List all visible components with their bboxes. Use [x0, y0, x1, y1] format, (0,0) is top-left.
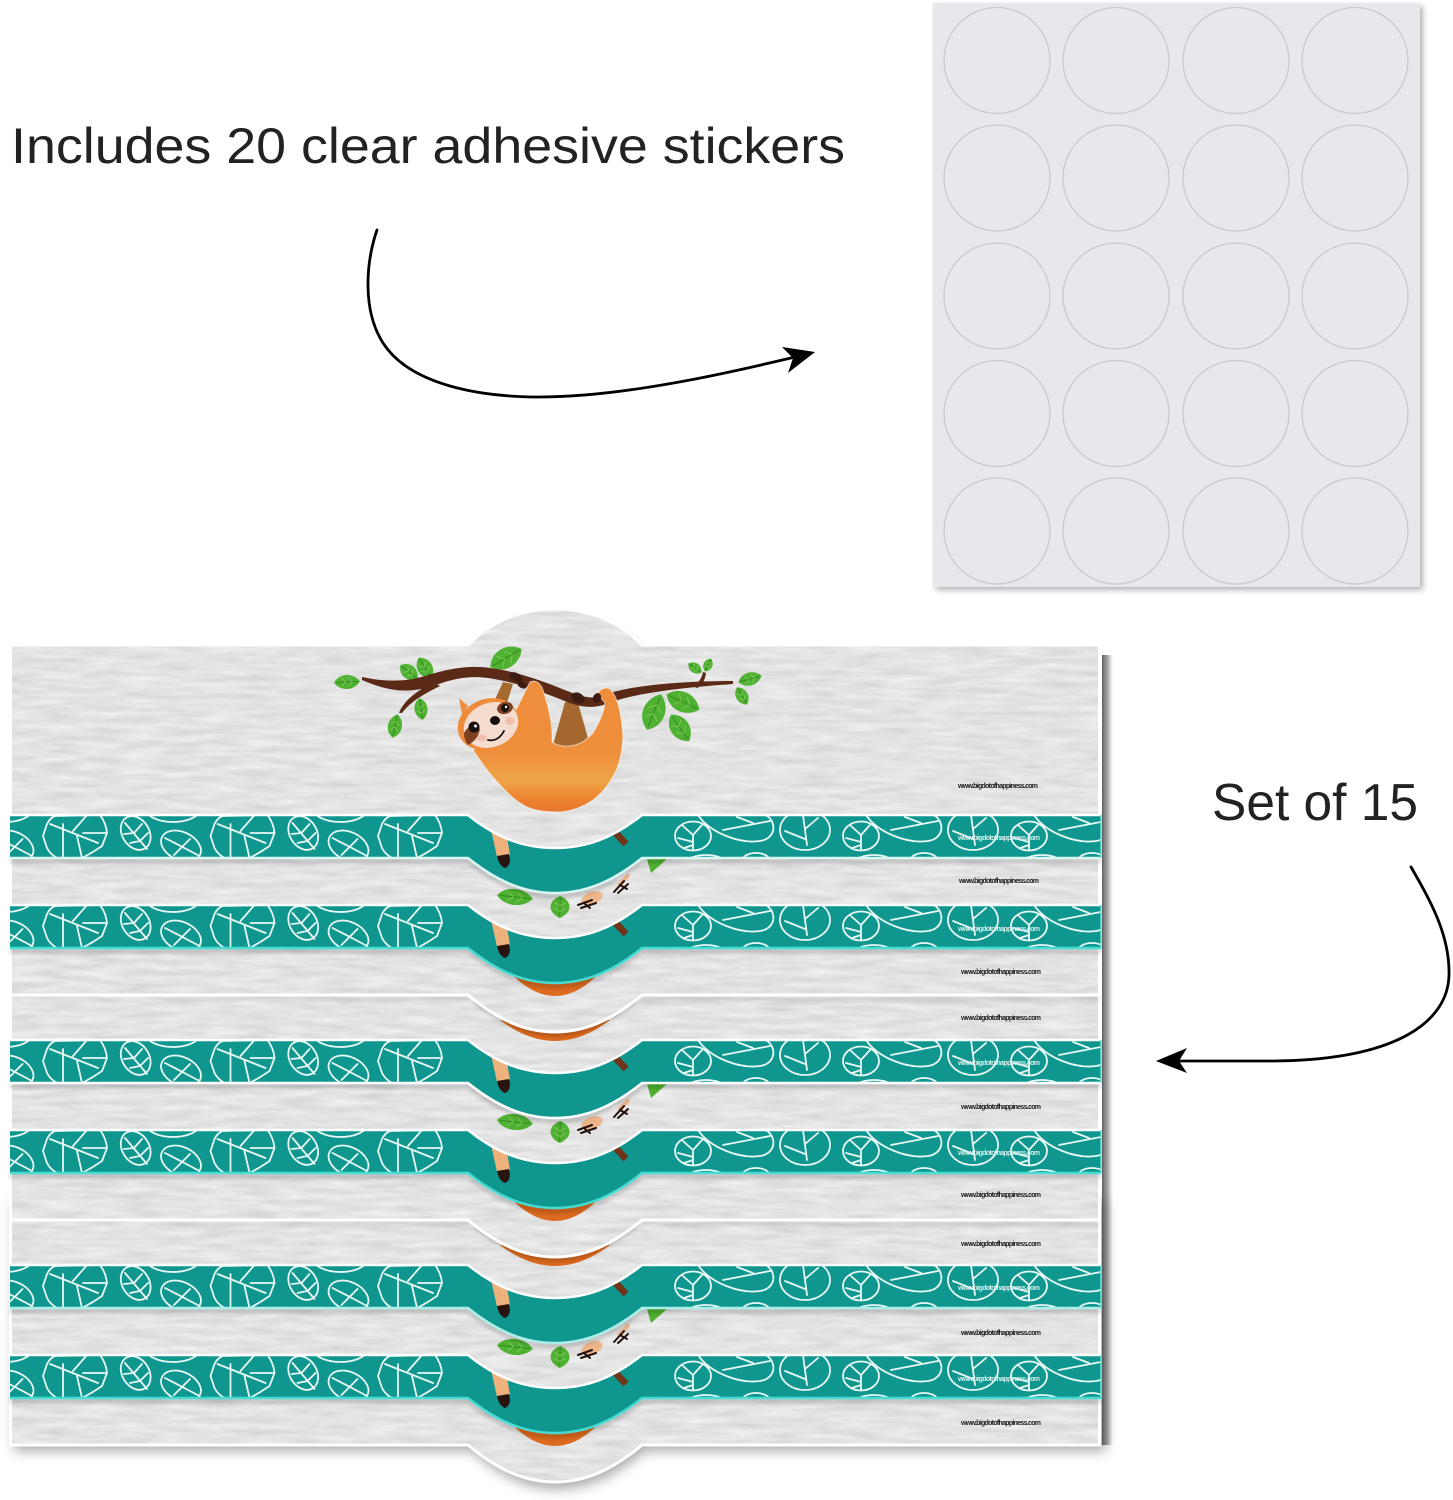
website labels: www.bigdotofhappiness.com — [960, 1104, 1041, 1111]
website labels: www.bigdotofhappiness.com — [960, 1192, 1041, 1199]
website labels: www.bigdotofhappiness.com — [957, 835, 1040, 842]
arrow: to wraps — [1156, 867, 1449, 1073]
branch — [362, 667, 733, 713]
website labels: www.bigdotofhappiness.com — [957, 926, 1040, 933]
website labels: www.bigdotofhappiness.com — [957, 1060, 1040, 1067]
brown back limbs — [491, 682, 588, 750]
website labels: www.bigdotofhappiness.com — [960, 1015, 1041, 1022]
website labels: www.bigdotofhappiness.com — [957, 1150, 1040, 1157]
sloth head — [450, 689, 526, 759]
website labels: www.bigdotofhappiness.com — [960, 1330, 1041, 1337]
sticker sheet panel — [933, 3, 1423, 590]
stack shadow — [14, 612, 1113, 1489]
sloth claws — [508, 670, 602, 706]
website labels: www.bigdotofhappiness.com — [957, 783, 1038, 790]
sloth body — [473, 681, 623, 812]
website labels: www.bigdotofhappiness.com — [957, 1376, 1040, 1383]
website labels: www.bigdotofhappiness.com — [957, 1285, 1040, 1292]
wrap stack — [10, 609, 1113, 1489]
website labels — [957, 783, 1041, 1427]
website labels: www.bigdotofhappiness.com — [958, 878, 1039, 885]
wrap group 2 — [10, 975, 1101, 1261]
branch leaves — [334, 640, 763, 747]
heading: set of 15: Set of 15 — [1212, 774, 1418, 832]
arrow: to sticker sheet — [368, 230, 815, 397]
website labels: www.bigdotofhappiness.com — [960, 1241, 1041, 1248]
wrap group 1 — [10, 609, 1101, 1036]
heading: includes stickers: Includes 20 clear adhesive stickers — [11, 118, 845, 174]
wrap group 3 — [10, 1200, 1101, 1482]
illustration: sloth on branch — [334, 640, 763, 812]
website labels: www.bigdotofhappiness.com — [960, 1420, 1041, 1427]
website labels: www.bigdotofhappiness.com — [960, 969, 1041, 976]
